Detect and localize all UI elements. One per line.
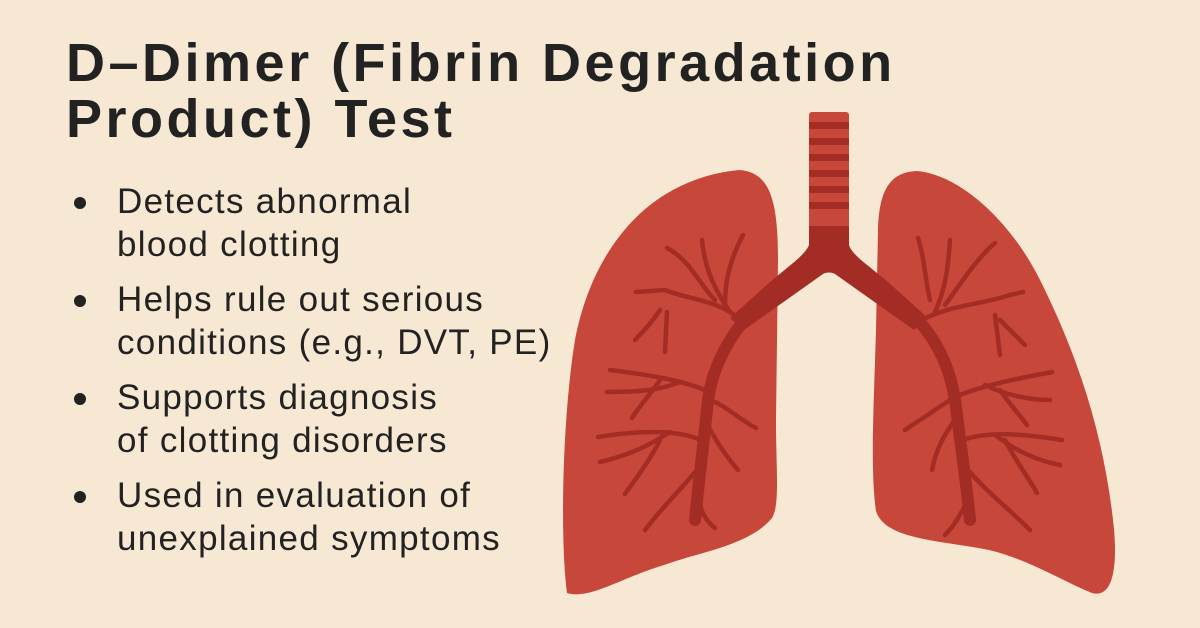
right bronchial tree (905, 238, 1062, 535)
trachea (730, 112, 928, 330)
title: D–Dimer (Fibrin Degradation (66, 33, 896, 93)
bullet: supports: Supports diagnosis (117, 378, 438, 417)
right lung (873, 171, 1115, 594)
bullet: used in (70, 474, 630, 560)
bullet: rule out: Helps rule out serious (117, 280, 484, 319)
bullet: supports: of clotting disorders (117, 421, 448, 460)
bullet: supports (70, 376, 630, 462)
bullet: detects: blood clotting (117, 225, 341, 264)
left bronchial tree (598, 235, 756, 530)
left lung (563, 170, 778, 594)
bullet: used in: Used in evaluation of (117, 476, 471, 515)
bullet: detects: Detects abnormal (117, 182, 412, 221)
bullet: detects (70, 180, 630, 266)
bullet list (74, 182, 552, 558)
bullet: rule out (70, 278, 630, 364)
bullet: rule out: conditions (e.g., DVT, PE) (117, 323, 552, 362)
bullet: used in: unexplained symptoms (117, 519, 501, 558)
title (66, 33, 896, 149)
title: Product) Test (66, 89, 456, 149)
